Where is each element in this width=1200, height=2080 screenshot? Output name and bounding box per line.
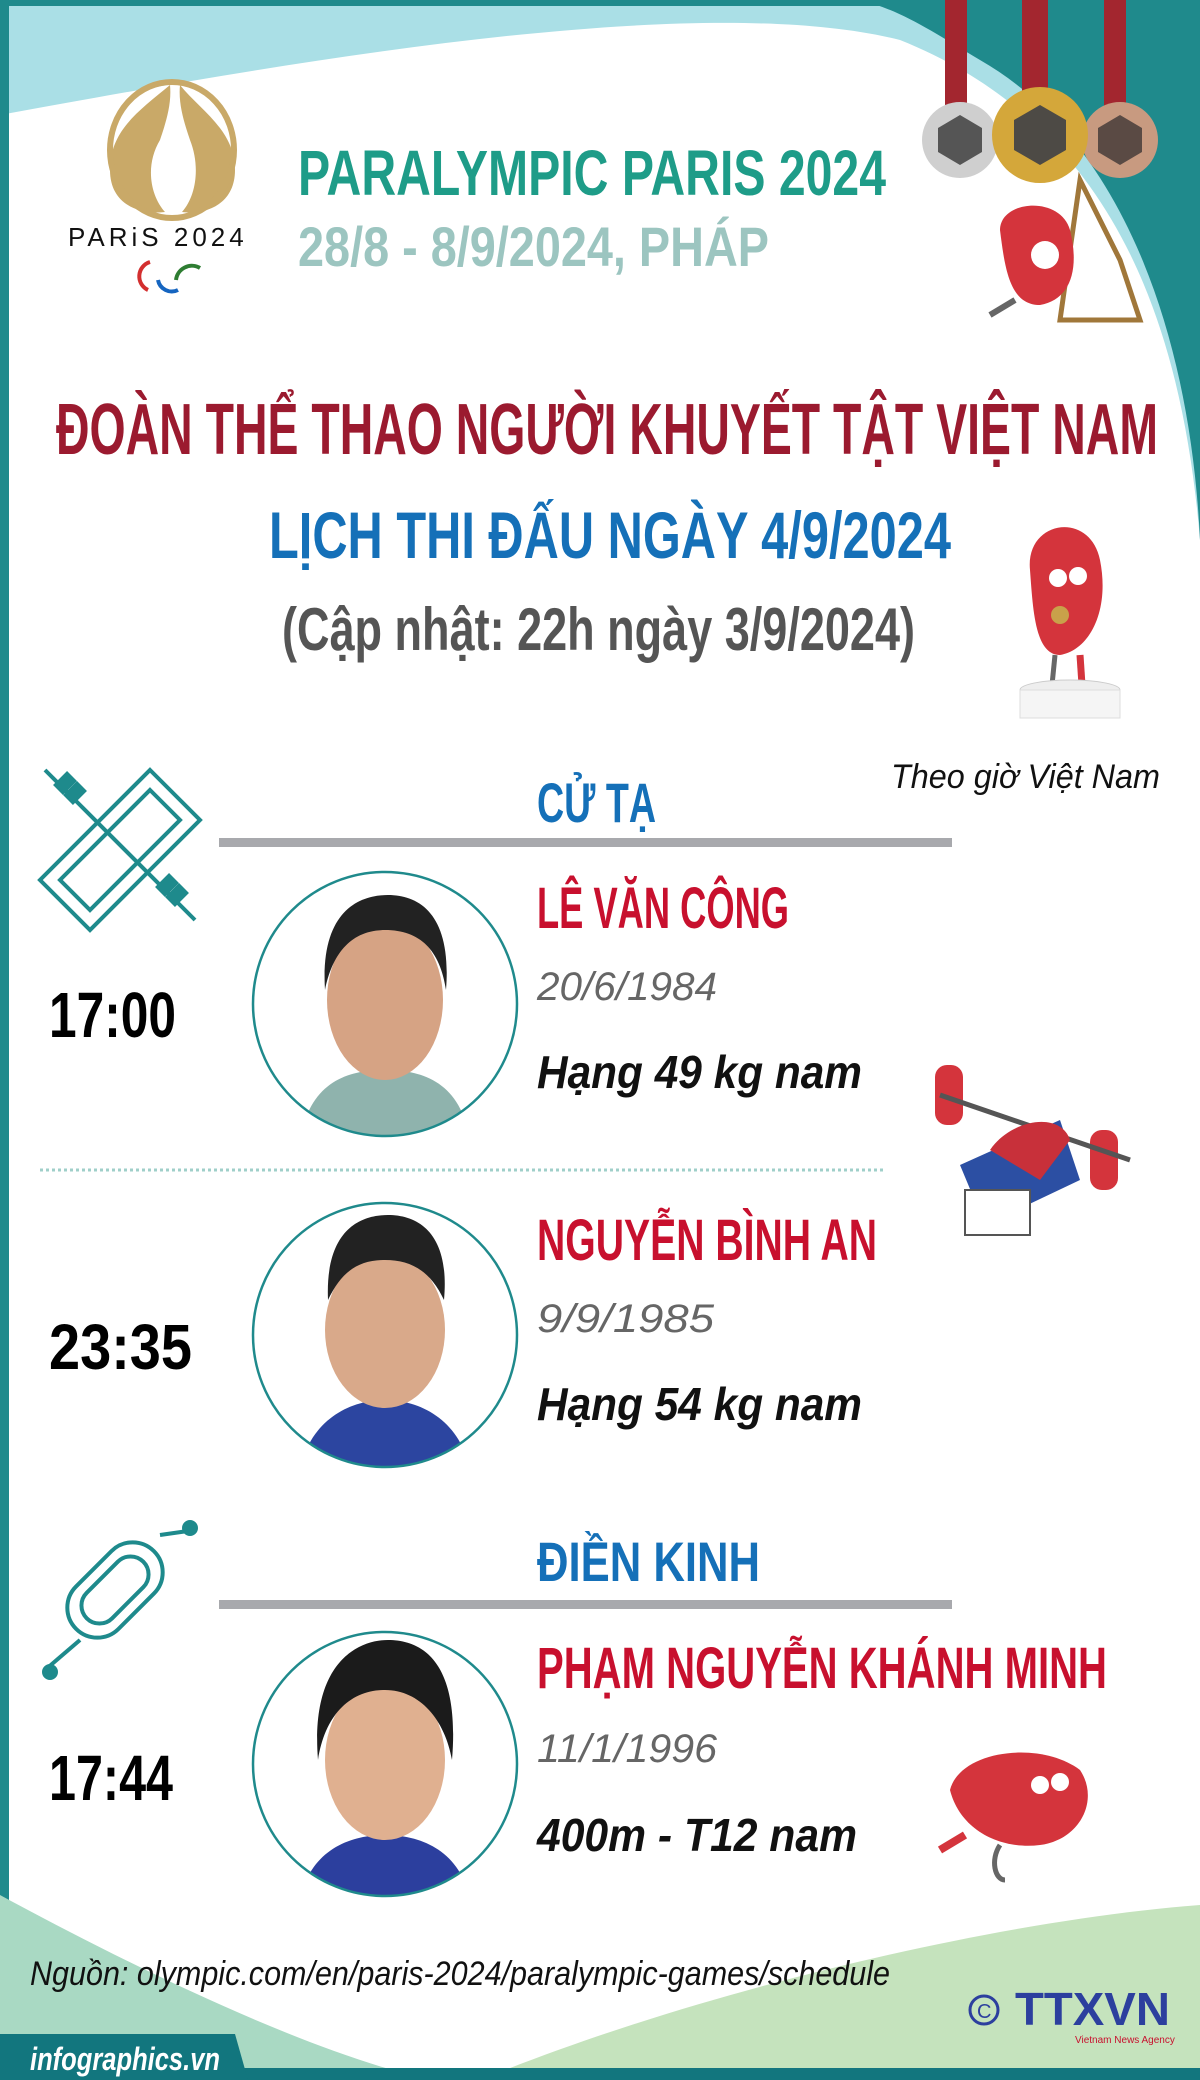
logo: TTXVN — [970, 1983, 1175, 2046]
category: Hạng 54 kg nam — [537, 1378, 862, 1430]
icon: mascot with Eiffel tower — [990, 180, 1140, 320]
section heading: athletics: ĐIỀN KINH — [537, 1530, 760, 1593]
title: PARALYMPIC PARIS 2024 — [298, 137, 886, 209]
logo: TTXVN: C — [977, 2001, 991, 2023]
name: LÊ VĂN CÔNG — [537, 876, 789, 941]
birthdate: 11/1/1996 — [537, 1727, 718, 1771]
athlete 2 — [49, 1200, 877, 1470]
logo: TTXVN: Vietnam News Agency — [1075, 2035, 1175, 2046]
time: 23:35 — [49, 1311, 192, 1383]
icon: medals — [922, 0, 1158, 183]
photo: Pham Nguyen Khanh Minh — [250, 1630, 520, 1900]
birthdate: 9/9/1985 — [537, 1297, 715, 1341]
logo: TTXVN: TTXVN — [1015, 1983, 1170, 2035]
athlete 1 — [49, 870, 862, 1140]
name: NGUYỄN BÌNH AN — [537, 1208, 877, 1273]
category: Hạng 49 kg nam — [537, 1046, 862, 1098]
section heading: athletics — [219, 1530, 952, 1609]
updated note: (Cập nhật: 22h ngày 3/9/2024) — [282, 596, 915, 663]
logo: Paris 2024: PARiS 2024 — [68, 222, 248, 252]
section heading: weightlifting — [219, 771, 952, 847]
icon: athletics track — [44, 1522, 196, 1678]
background bottom wave — [0, 1895, 1200, 2080]
photo: Nguyen Binh An — [250, 1200, 520, 1470]
note: time zone: Theo giờ Việt Nam — [891, 758, 1160, 796]
subtitle dates: 28/8 - 8/9/2024, PHÁP — [298, 215, 769, 278]
icon: weightlifting — [40, 770, 200, 930]
icon: mascot bench press — [935, 1065, 1130, 1235]
icon: mascot on podium — [1020, 527, 1120, 718]
heading: schedule date: LỊCH THI ĐẤU NGÀY 4/9/2024 — [269, 498, 951, 572]
section heading: weightlifting: CỬ TẠ — [537, 771, 656, 834]
time: 17:00 — [49, 979, 176, 1051]
time: 17:44 — [49, 1742, 173, 1814]
footer brand: infographics.vn — [30, 2041, 220, 2077]
athlete 3 — [49, 1630, 1107, 1900]
birthdate: 20/6/1984 — [536, 965, 717, 1009]
logo: Paris 2024 — [68, 82, 248, 291]
source: Nguồn: olympic.com/en/paris-2024/paralympic-games/schedule — [30, 1955, 890, 1993]
icon: running mascot — [940, 1753, 1088, 1880]
category: 400m - T12 nam — [536, 1809, 857, 1861]
divider dotted — [40, 1168, 886, 1172]
photo: Le Van Cong — [250, 870, 520, 1140]
